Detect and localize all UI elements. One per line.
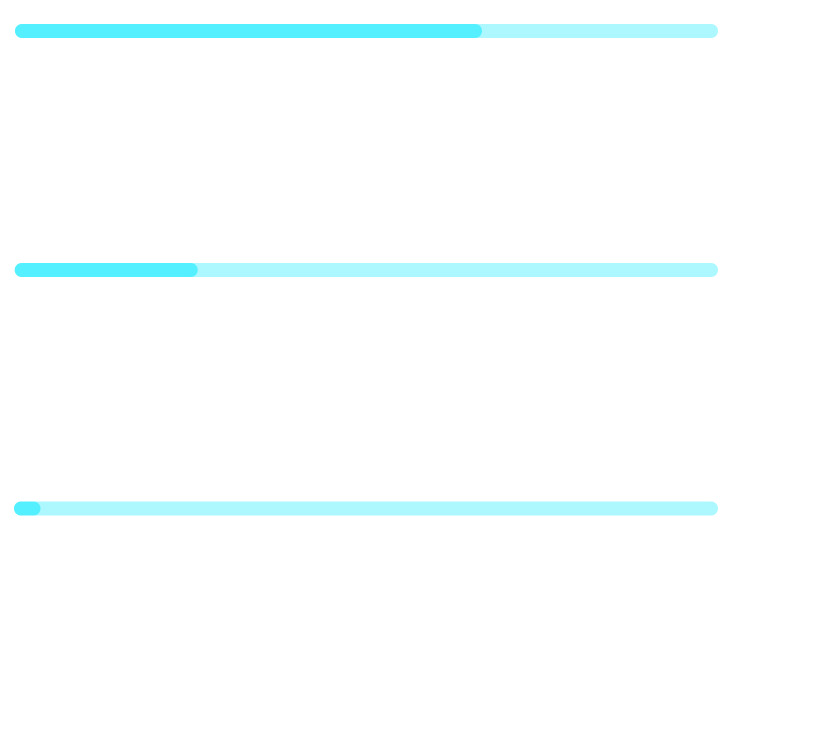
progress bar 2 <box>15 263 718 277</box>
progress bar 1 <box>15 24 718 38</box>
progress bar 3 <box>14 502 718 516</box>
